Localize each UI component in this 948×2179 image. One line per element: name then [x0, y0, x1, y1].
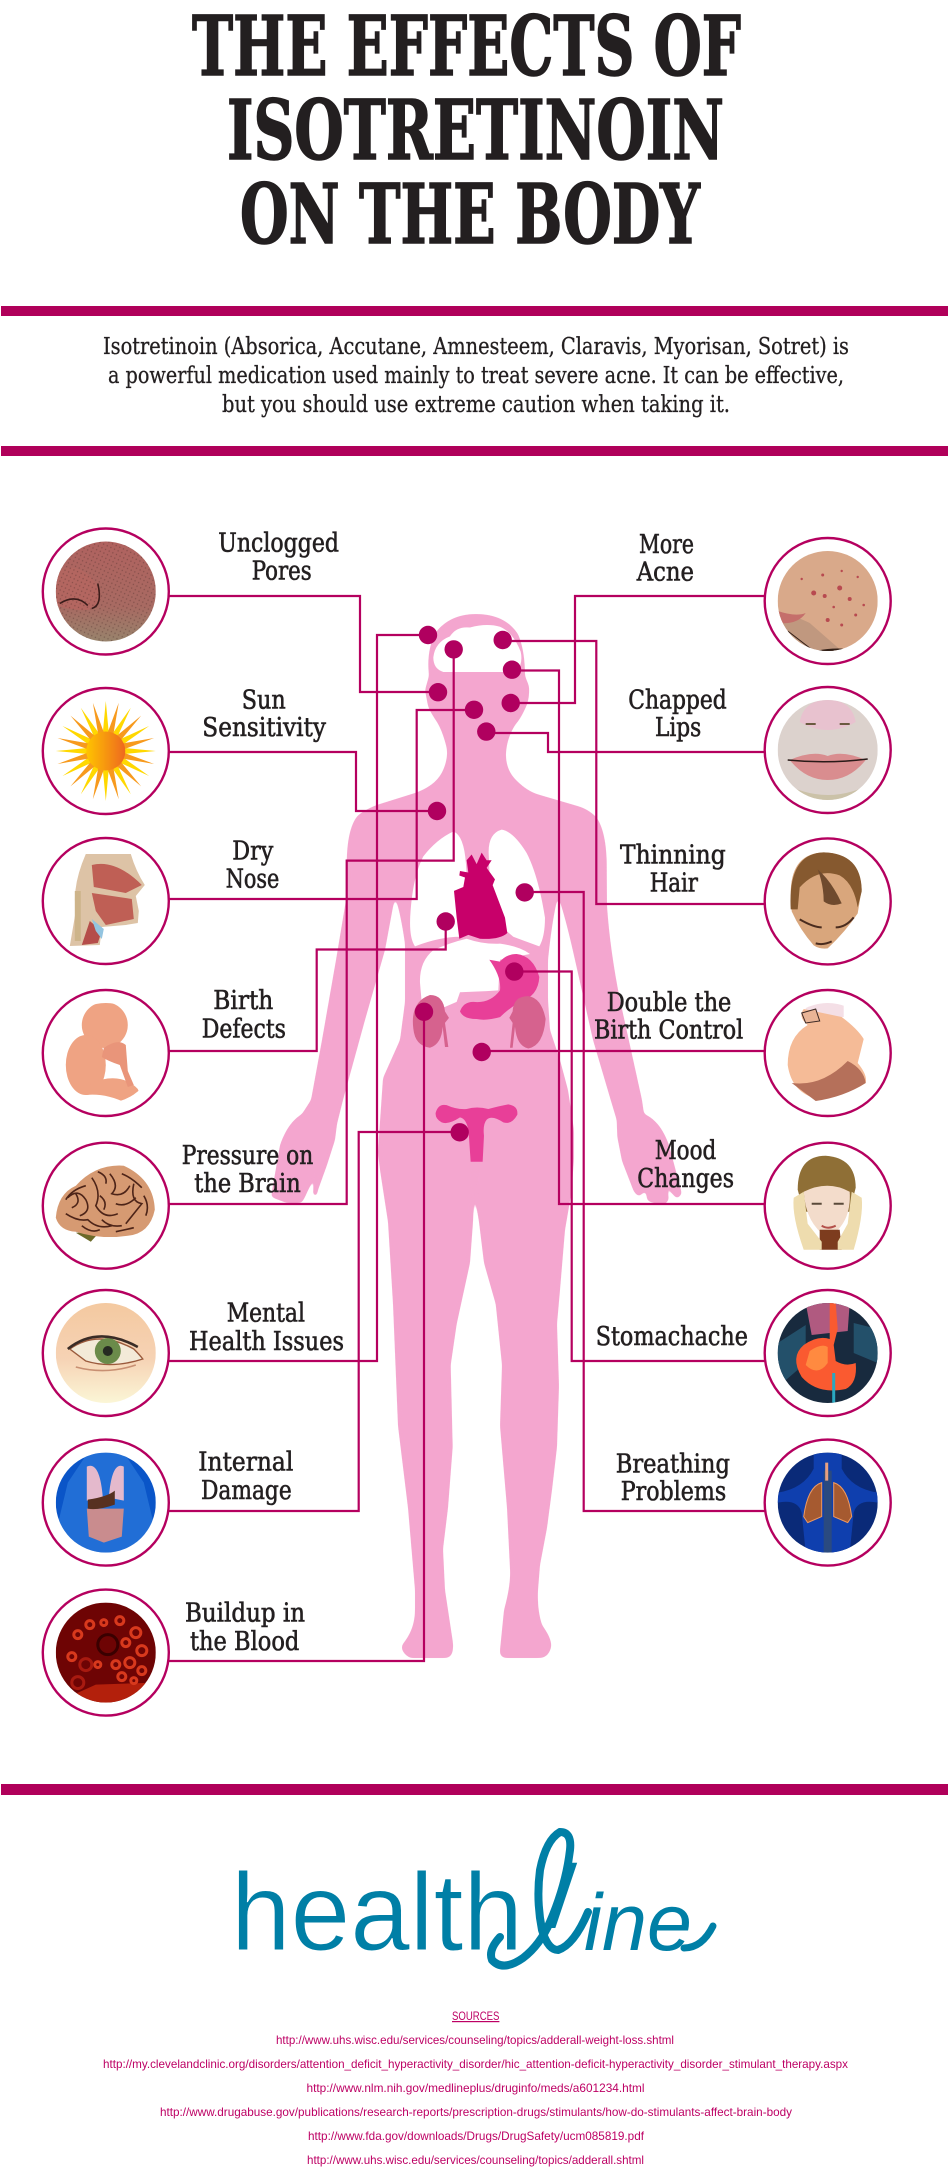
label: pressure on the brain: the Brain: [194, 1169, 301, 1199]
line: more acne: [511, 596, 765, 703]
sources: SOURCES: [452, 2009, 499, 2023]
sources: http://www.drugabuse.gov/publications/research-reports/prescription-drugs/stimulants/how-do-stimulants-affect-brain-body: [160, 2105, 792, 2119]
line: chapped lips: [486, 733, 765, 752]
photo: blood cells: [43, 1590, 169, 1716]
photo: sun: [43, 688, 169, 814]
line: thinning hair: [503, 641, 765, 904]
line: breathing problems: [525, 892, 765, 1511]
label: more acne: Acne: [636, 557, 694, 587]
title: [192, 0, 741, 263]
label: dry nose: Dry: [232, 837, 274, 867]
photo: internal organs: [43, 1440, 169, 1566]
label: mood changes: Mood: [655, 1136, 716, 1166]
label: more acne: More: [639, 530, 694, 560]
label: mood changes: [637, 1136, 734, 1194]
photo: lungs: [765, 1440, 891, 1566]
label: double the birth control: Birth Control: [594, 1016, 743, 1046]
organ: right kidney: [509, 996, 546, 1049]
organ: liver: [420, 939, 530, 1008]
healthline logo: l: [543, 1847, 580, 1948]
photo: acne: [765, 538, 891, 664]
label: stomachache: Stomachache: [596, 1322, 748, 1352]
label: pressure on the brain: Pressure on: [182, 1141, 314, 1171]
line: double the birth control: [482, 1050, 765, 1052]
line: pressure on the brain: [169, 649, 454, 1204]
label: birth defects: Defects: [202, 1015, 286, 1045]
photo: thinning hair: [765, 838, 891, 964]
label: dry nose: Nose: [226, 865, 279, 895]
label: chapped lips: Chapped: [628, 686, 727, 716]
label: breathing problems: Breathing: [616, 1450, 730, 1480]
organ: right lung: [489, 830, 545, 946]
label: unclogged pores: [218, 529, 339, 587]
body silhouette: [271, 614, 682, 1658]
organ: heart: [454, 853, 507, 939]
label: buildup in the blood: Buildup in: [185, 1599, 305, 1629]
line: mental health issues: [169, 635, 428, 1361]
label: internal damage: Damage: [201, 1476, 292, 1506]
label: mental health issues: Mental: [227, 1299, 305, 1329]
label: birth defects: [202, 986, 286, 1045]
organ: left kidney: [413, 995, 449, 1048]
label: buildup in the blood: [185, 1599, 305, 1657]
photo: nose cross-section: [43, 838, 169, 964]
title: ON THE BODY: [240, 167, 701, 263]
healthline logo: health: [231, 1851, 523, 1974]
label: thinning hair: Thinning: [620, 841, 726, 871]
photo: mood changes: [765, 1143, 891, 1269]
label: birth defects: Birth: [213, 986, 274, 1016]
organ: uterus: [436, 1104, 517, 1162]
title: ISOTRETINOIN: [227, 83, 724, 179]
photo: eye: [43, 1290, 169, 1416]
label: dry nose: [226, 837, 279, 895]
sources: http://www.uhs.wisc.edu/services/counseling/topics/adderall-weight-loss.shtml: [276, 2033, 674, 2047]
label: breathing problems: Problems: [621, 1477, 726, 1507]
intro text: but you should use extreme caution when taking it.: [222, 392, 730, 418]
label: mental health issues: Health Issues: [189, 1327, 344, 1357]
sources: http://www.uhs.wisc.edu/services/counseling/topics/adderall.shtml: [307, 2153, 644, 2167]
intro text: [103, 334, 849, 418]
line: dry nose: [169, 710, 474, 899]
line: internal damage: [169, 1132, 460, 1511]
label: unclogged pores: Unclogged: [218, 529, 339, 559]
label: thinning hair: [620, 841, 726, 898]
photo: pregnant belly: [765, 990, 891, 1116]
photo: brain: [43, 1143, 169, 1269]
label: mood changes: Changes: [637, 1164, 734, 1194]
label: sun sensitivity: [202, 686, 326, 743]
label: more acne: [636, 530, 694, 587]
sources: http://my.clevelandclinic.org/disorders/attention_deficit_hyperactivity_disorder/hic_attention-deficit-hyperactivity_disorder_stimulant_therapy.aspx: [103, 2057, 848, 2071]
line: buildup in the blood: [169, 1012, 424, 1661]
label: sun sensitivity: Sensitivity: [202, 713, 326, 743]
line: birth defects: [169, 921, 446, 1051]
line: stomachache: [514, 972, 765, 1361]
photo: stomach: [765, 1290, 891, 1416]
label: chapped lips: [628, 686, 727, 743]
organ: left lung: [410, 832, 467, 946]
label: pressure on the brain: [182, 1141, 314, 1199]
photo: chapped lips: [765, 687, 891, 813]
label: sun sensitivity: Sun: [242, 686, 286, 716]
photo: pores: [43, 528, 169, 654]
label: thinning hair: Hair: [650, 868, 698, 898]
label: double the birth control: Double the: [607, 988, 731, 1018]
sources: http://www.nlm.nih.gov/medlineplus/druginfo/meds/a601234.html: [306, 2081, 644, 2095]
photo: fetus: [43, 990, 169, 1116]
healthline logo: ine: [584, 1878, 692, 1968]
line: mood changes: [512, 670, 765, 1204]
healthline logo: [231, 1832, 713, 1974]
label: mental health issues: [189, 1299, 344, 1357]
line: sun sensitivity: [169, 752, 437, 811]
sources: [103, 2009, 848, 2167]
label: breathing problems: [616, 1450, 730, 1507]
organ: stomach: [460, 954, 539, 1020]
line: unclogged pores: [169, 596, 438, 692]
label: double the birth control: [594, 988, 743, 1046]
connector lines: [169, 596, 765, 1661]
label: chapped lips: Lips: [655, 713, 701, 743]
label: internal damage: [198, 1448, 293, 1506]
label: internal damage: Internal: [198, 1448, 293, 1478]
sources: http://www.fda.gov/downloads/Drugs/DrugSafety/ucm085819.pdf: [308, 2129, 645, 2143]
label: buildup in the blood: the Blood: [190, 1627, 299, 1657]
label: unclogged pores: Pores: [252, 557, 312, 587]
organ: brain: [433, 625, 521, 672]
body markers: [415, 626, 534, 1142]
